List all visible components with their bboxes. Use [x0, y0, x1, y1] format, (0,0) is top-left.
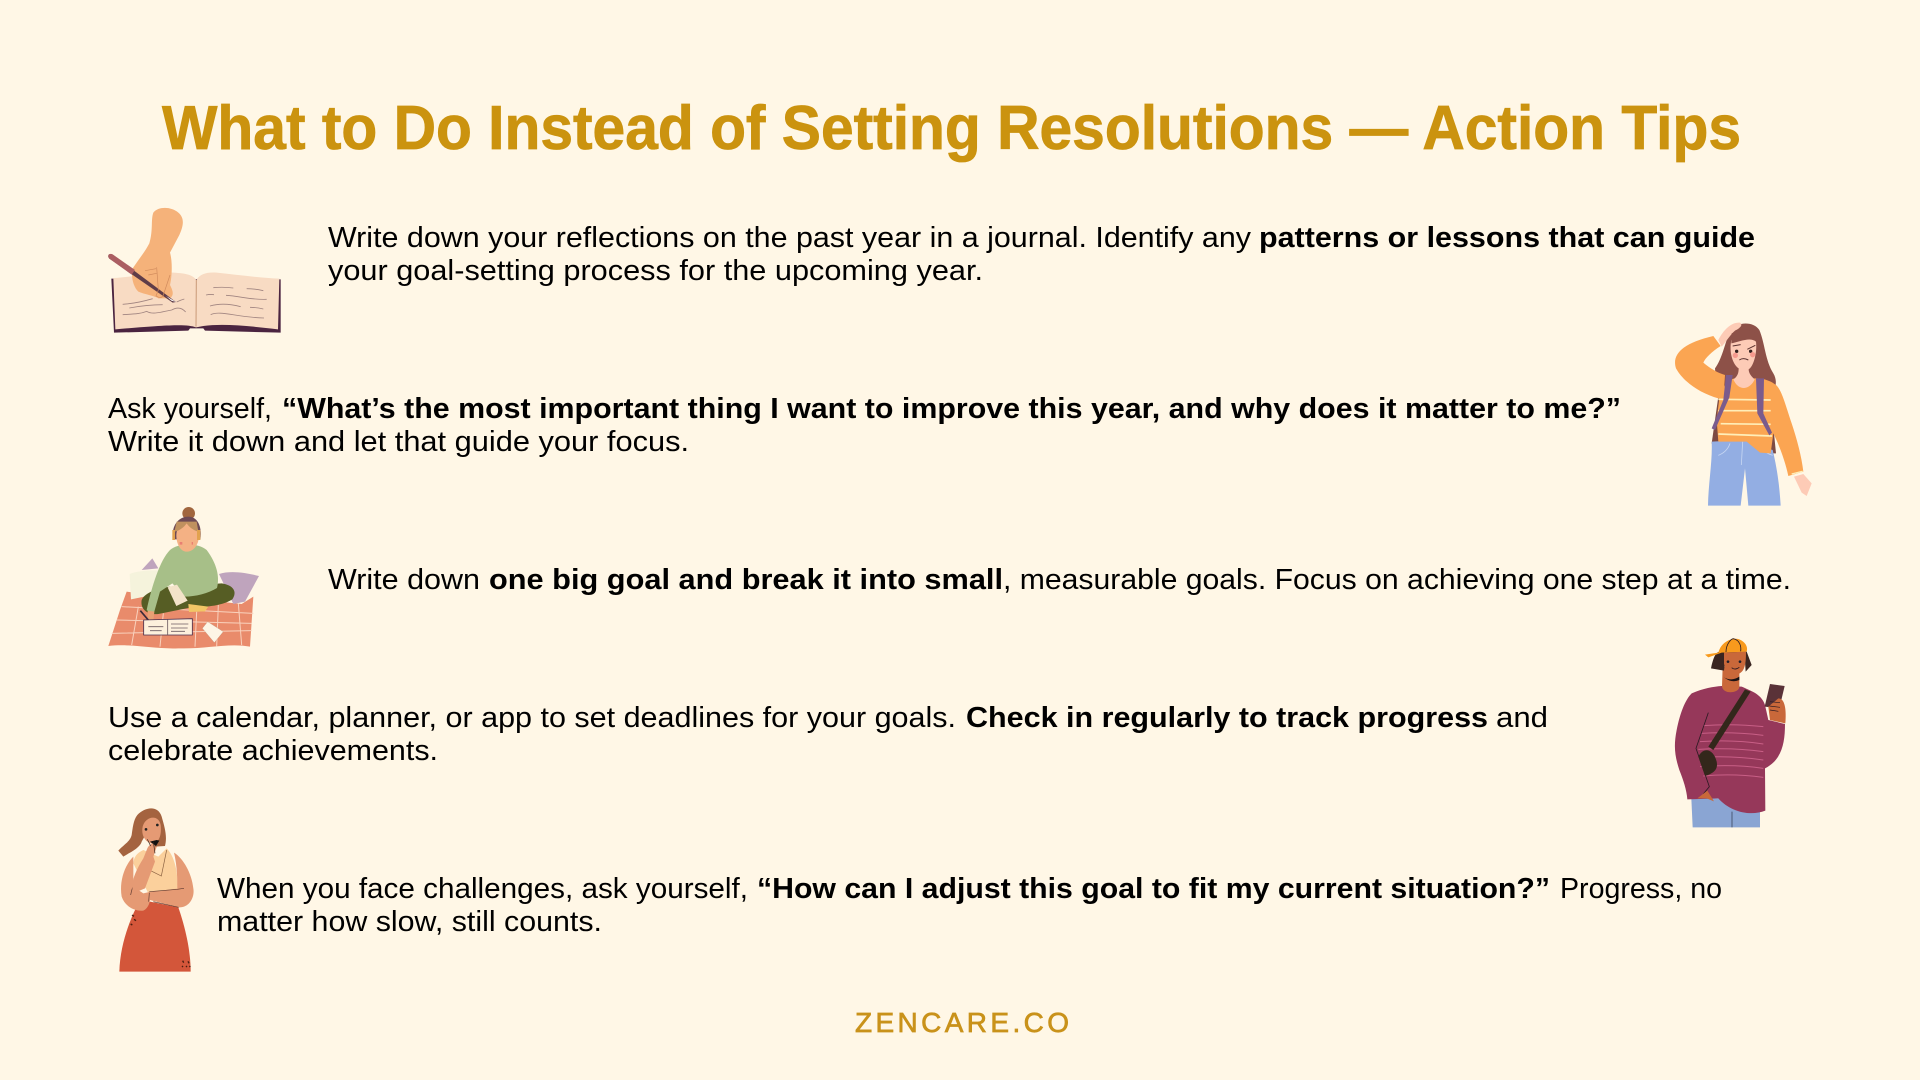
text: big goal tip [328, 564, 1791, 596]
text: challenges tip: “How can I adjust this goal to fit my current situation?” [757, 873, 1550, 905]
text: calendar tip: Check in regularly to track progress [966, 702, 1488, 734]
text: big goal tip: , measurable goals. Focus on achieving one step at a time. [1003, 564, 1791, 596]
footer brand: ZENCARE.CO [855, 1007, 1069, 1038]
text: reflections tip: Write down your reflections on the past year in a journal. Identify any [328, 222, 1252, 254]
icon: woman sitting on picnic blanket [108, 507, 259, 648]
text: big goal tip: one big goal and break it into small [489, 564, 1003, 596]
text: ask yourself tip: Write it down and let that guide your focus. [108, 426, 689, 458]
text: big goal tip: Write down [328, 564, 480, 596]
text: reflections tip: patterns or lessons that can guide [1259, 222, 1755, 254]
text: challenges tip: When you face challenges, ask yourself, [217, 873, 748, 905]
text: calendar tip: and [1496, 702, 1548, 734]
text: calendar tip: Use a calendar, planner, or app to set deadlines for your goals. [108, 702, 956, 734]
text: reflections tip [328, 222, 1755, 287]
text: ask yourself tip: “What’s the most important thing I want to improve this year, and why does it matter to me?” [282, 393, 1621, 425]
text: challenges tip: Progress, no [1560, 873, 1722, 905]
text: calendar tip [108, 702, 1548, 767]
icon: thoughtful woman [118, 808, 194, 972]
title: What to Do Instead of Setting Resolutions — Action Tips [162, 94, 1741, 163]
icon: puzzled girl with backpack [1675, 323, 1812, 506]
text: ask yourself tip [108, 393, 1621, 458]
text: challenges tip [217, 873, 1722, 938]
text: ask yourself tip: Ask yourself, [108, 393, 272, 425]
icon: man with cap checking phone [1675, 639, 1786, 827]
icon: hand writing in journal [108, 208, 281, 333]
text: reflections tip: your goal-setting process for the upcoming year. [328, 255, 983, 287]
text: challenges tip: matter how slow, still counts. [217, 906, 602, 938]
text: calendar tip: celebrate achievements. [108, 735, 438, 767]
